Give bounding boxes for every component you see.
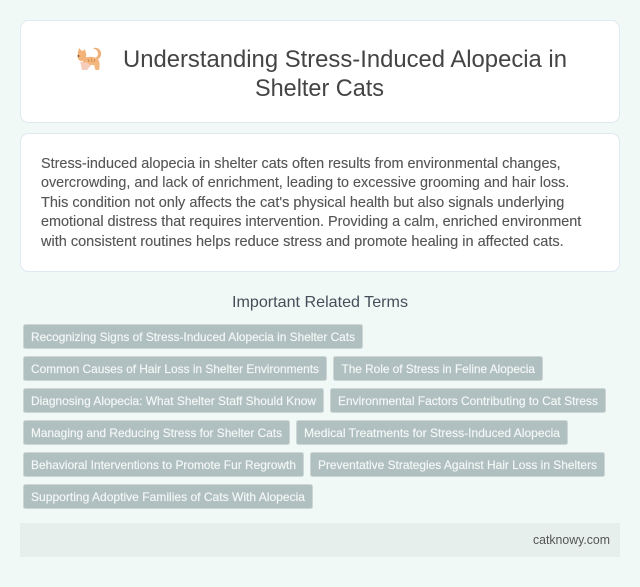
- description text: emotional distress that requires intervention. Providing a calm, enriched environment: [41, 214, 581, 230]
- description text: Stress-induced alopecia in shelter cats often results from environmental changes,: [41, 156, 561, 172]
- tag: preventative strategies: Preventative Strategies Against Hair Loss in Shelters: [318, 458, 597, 472]
- panel: related term tags: [24, 324, 606, 508]
- tag: recognizing signs: [24, 324, 362, 348]
- panel: title card: [20, 20, 620, 122]
- title text: [123, 46, 567, 102]
- tag: environmental factors: Environmental Factors Contributing to Cat Stress: [338, 394, 598, 408]
- heading: important related terms: Important Related Terms: [232, 294, 408, 311]
- tag: managing stress: Managing and Reducing Stress for Shelter Cats: [31, 426, 282, 440]
- tag: managing stress: [24, 420, 290, 444]
- tag: diagnosing alopecia: Diagnosing Alopecia: What Shelter Staff Should Know: [31, 394, 316, 408]
- tag: medical treatments: Medical Treatments for Stress-Induced Alopecia: [304, 426, 560, 440]
- tag: medical treatments: [296, 420, 568, 444]
- tag: supporting adoptive families: Supporting Adoptive Families of Cats With Alopecia: [31, 490, 305, 504]
- tag: behavioral interventions: Behavioral Interventions to Promote Fur Regrowth: [31, 458, 296, 472]
- tag: supporting adoptive families: [24, 484, 312, 508]
- description text: [40, 156, 581, 250]
- tag: environmental factors: [330, 388, 606, 412]
- title text: Understanding Stress-Induced Alopecia in: [123, 46, 567, 73]
- footer bar: [20, 523, 620, 557]
- description text: overcrowding, and lack of enrichment, leading to excessive grooming and hair loss.: [41, 175, 569, 191]
- tag: role of stress: The Role of Stress in Feline Alopecia: [342, 362, 535, 376]
- tag: behavioral interventions: [24, 452, 304, 476]
- tag: common causes: Common Causes of Hair Loss in Shelter Environments: [31, 362, 319, 376]
- tag: common causes: [24, 356, 326, 380]
- tag: diagnosing alopecia: [24, 388, 324, 412]
- title text: Shelter Cats: [255, 75, 384, 102]
- description text: This condition not only affects the cat's physical health but also signals underlying: [41, 195, 564, 211]
- tag: preventative strategies: [310, 452, 604, 476]
- tag: recognizing signs: Recognizing Signs of Stress-Induced Alopecia in Shelter Cats: [31, 330, 355, 344]
- icon: orange cat: [78, 48, 101, 70]
- panel: description card: [20, 134, 620, 272]
- footer source text: catknowy.com: [533, 533, 610, 547]
- tag: role of stress: [334, 356, 542, 380]
- description text: with consistent routines helps reduce stress and promote healing in affected cats.: [40, 234, 564, 250]
